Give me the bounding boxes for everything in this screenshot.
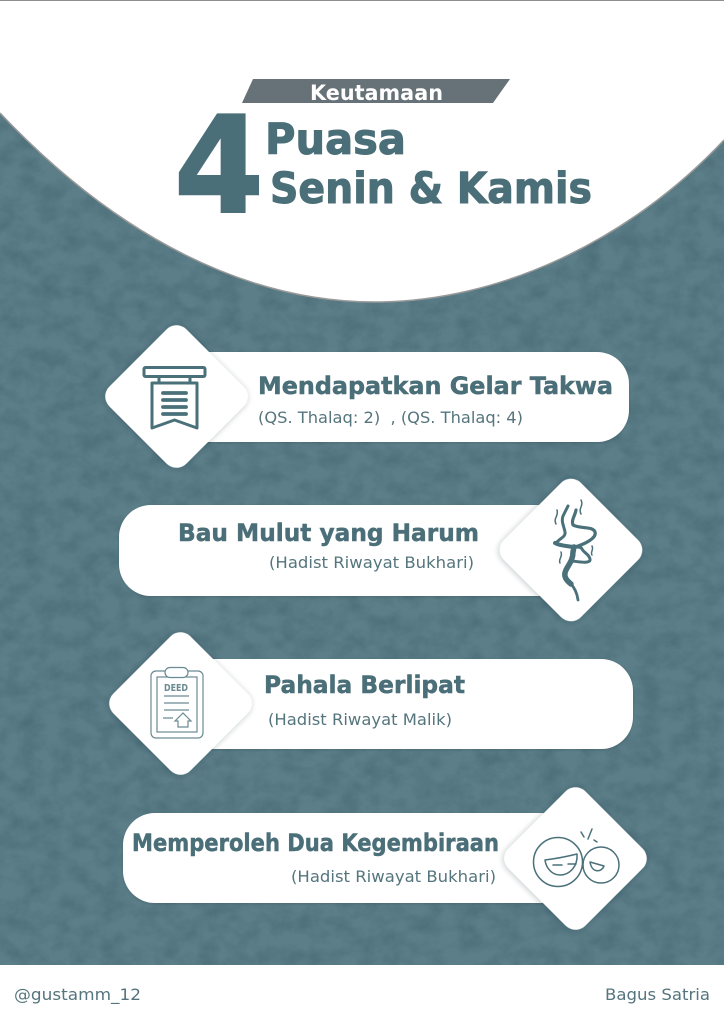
card 4 diamond	[498, 781, 653, 936]
icon: rising smell wisps	[555, 500, 595, 600]
card 2: Bau Mulut yang Harum	[119, 473, 648, 627]
card 2 title: Bau Mulut yang Harum	[178, 519, 479, 547]
icon: hanging scroll banner	[144, 368, 205, 428]
banner: Keutamaan	[242, 79, 510, 105]
card 3 title: Pahala Berlipat	[264, 671, 465, 699]
footer author: Bagus Satria	[605, 985, 710, 1004]
card 3 pill	[170, 659, 633, 749]
heading: Senin & Kamis: Senin & Kamis	[270, 164, 592, 214]
card 1: Mendapatkan Gelar Takwa	[99, 319, 629, 474]
card 4: Memperoleh Dua Kegembiraan	[123, 781, 653, 936]
heading: Puasa: Puasa	[265, 115, 406, 165]
card 4 pill	[123, 813, 573, 903]
card 3 diamond	[103, 626, 258, 781]
card 2 reference: (Hadist Riwayat Bukhari)	[269, 553, 474, 572]
icon: two laughing faces	[534, 829, 619, 886]
banner: Keutamaan: Keutamaan	[310, 81, 443, 105]
card 4 reference: (Hadist Riwayat Bukhari)	[291, 867, 496, 886]
icon: deed clipboard: DEED	[164, 683, 188, 694]
card 3 reference: (Hadist Riwayat Malik)	[268, 710, 452, 729]
card 2 pill	[119, 505, 569, 596]
white curved header	[0, 0, 724, 302]
footer handle: @gustamm_12	[14, 985, 141, 1005]
card 4 title: Memperoleh Dua Kegembiraan	[132, 829, 499, 857]
card 3: Pahala Berlipat	[103, 626, 633, 781]
card 1 diamond	[99, 319, 254, 474]
card 1 pill	[170, 352, 629, 442]
curve edge line	[0, 113, 724, 302]
icon: deed clipboard	[151, 668, 203, 738]
card 1 title: Mendapatkan Gelar Takwa	[258, 372, 613, 400]
card 2 diamond	[494, 473, 648, 627]
card 1 references: (QS. Thalaq: 2) , (QS. Thalaq: 4)	[258, 408, 523, 427]
top edge line	[0, 0, 724, 1]
title block	[174, 79, 592, 244]
big number 4: 4	[174, 88, 264, 244]
